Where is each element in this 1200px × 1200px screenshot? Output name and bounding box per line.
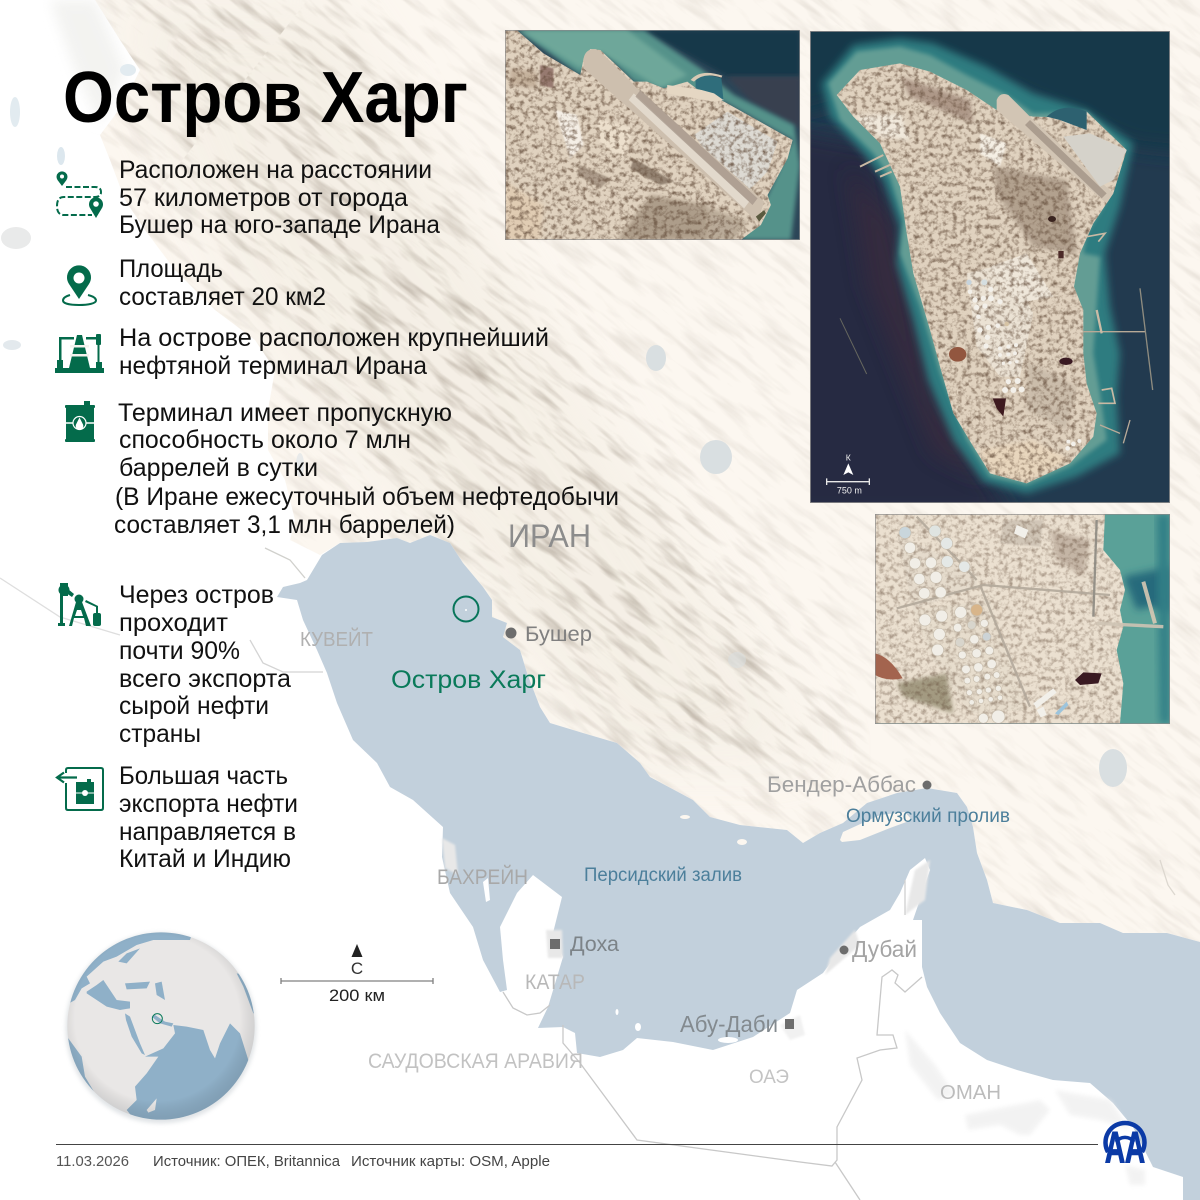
- text block: export share: проходит: [119, 609, 229, 637]
- satellite image: whole island: [810, 31, 1170, 503]
- Kharg location ring: [454, 596, 478, 622]
- footer: source: Источник: ОПЕК, Britannica: [153, 1153, 341, 1170]
- map label: Iran: ИРАН: [508, 518, 591, 554]
- islands: [483, 812, 912, 1043]
- map label: Doha: [550, 933, 619, 956]
- mountains: Zagros band: [101, 0, 1200, 940]
- scale bar: 750 m: [837, 486, 862, 496]
- globe locator: [63, 930, 260, 1127]
- Indian Ocean: [126, 1024, 248, 1120]
- Baltic: [118, 948, 140, 963]
- text block: distance: Расположен на расстоянии: [119, 156, 432, 184]
- text block: destinations: [119, 762, 298, 873]
- logo: Anadolu Agency: AA: [1105, 1123, 1145, 1172]
- ponds: [875, 653, 903, 679]
- icon: location pin: [63, 265, 96, 305]
- text block: distance: Бушер на юго-западе Ирана: [119, 211, 440, 239]
- land: Iran and eastern coast: [95, 0, 1200, 942]
- text block: terminal: нефтяной терминал Ирана: [119, 352, 427, 380]
- map label: Kuwait: КУВЕЙТ: [300, 627, 373, 651]
- icon: oil terminal: [55, 334, 104, 373]
- text block: capacity: Терминал имеет пропускную: [118, 399, 452, 427]
- map label: Persian Gulf: Персидский залив: [584, 865, 742, 886]
- Madagascar: [147, 1098, 157, 1113]
- town: [1063, 133, 1127, 187]
- harbour: [667, 85, 724, 102]
- scale and north arrow: С: [351, 959, 363, 978]
- text block: export share: почти 90%: [119, 637, 240, 665]
- reef shelf: [822, 38, 1133, 493]
- land: [876, 514, 1125, 724]
- text block: destinations: экспорта нефти: [119, 790, 298, 818]
- map label: Dubai: Дубай: [852, 936, 917, 962]
- text block: distance: 57 километров от города: [119, 184, 408, 212]
- text block: capacity: составляет 3,1 млн баррелей): [114, 511, 455, 539]
- Mediterranean: [87, 980, 130, 1010]
- footer rule: [56, 1144, 1098, 1146]
- satellite image: north of the island, airport: [505, 30, 800, 240]
- text block: capacity: [114, 399, 619, 539]
- text block: distance: [119, 156, 440, 239]
- land: [837, 63, 1127, 483]
- text block: capacity: (В Иране ежесуточный объем нефтедобычи: [115, 483, 619, 511]
- storage tanks: [899, 525, 1005, 723]
- buildings: [1014, 525, 1057, 717]
- scale and north arrow: [281, 944, 433, 1005]
- text block: export share: [119, 581, 291, 748]
- text block: capacity: баррелей в сутки: [119, 454, 318, 482]
- jetties: [840, 155, 1153, 443]
- text block: export share: всего экспорта: [119, 665, 291, 693]
- text block: terminal: [119, 324, 549, 380]
- map label: Oman: ОМАН: [940, 1082, 1001, 1104]
- map label: Qatar: КАТАР: [525, 971, 585, 994]
- map label: Bahrain: БАХРЕЙН: [437, 865, 528, 889]
- Red Sea: [125, 1013, 145, 1055]
- text block: area: Площадь: [119, 255, 223, 283]
- ponds: [949, 347, 966, 362]
- footer: map source: Источник карты: OSM, Apple: [351, 1153, 550, 1170]
- icon: oil barrel: [65, 401, 95, 442]
- Atlantic lower-left: [68, 1038, 94, 1092]
- land: [505, 30, 800, 240]
- map label: Doha: Доха: [570, 933, 619, 956]
- runway: [997, 94, 1113, 203]
- water: [810, 31, 1170, 503]
- icon: oil export: [57, 768, 103, 810]
- text block: area: [119, 255, 326, 311]
- map label: Bushehr: Бушер: [525, 623, 592, 646]
- text block: area: составляет 20 км2: [119, 283, 326, 311]
- Pacific edge: [236, 973, 254, 1014]
- Oman mountains texture: [905, 1030, 1145, 1185]
- title: Остров Харг: [63, 58, 468, 138]
- harbour: [1047, 108, 1087, 130]
- map label: Bandar Abbas: Бендер-Аббас: [767, 772, 916, 797]
- logo: Anadolu Agency: [1105, 1123, 1145, 1172]
- text block: destinations: Китай и Индию: [119, 845, 291, 873]
- text block: terminal: На острове расположен крупнейший: [119, 324, 549, 352]
- borders: [0, 548, 1175, 1200]
- lakes: [1, 64, 1127, 787]
- scale and north arrow: 200 км: [329, 986, 385, 1005]
- text block: capacity: способность около 7 млн: [119, 426, 411, 454]
- scale bar: [827, 453, 869, 496]
- text block: export share: Через остров: [119, 581, 274, 609]
- text block: export share: сырой нефти: [119, 692, 269, 720]
- globe marker: [152, 1014, 162, 1024]
- satellite image: oil storage tanks: [875, 514, 1170, 724]
- sea: Persian Gulf and Gulf of Oman: [277, 535, 1200, 1200]
- storage tanks: [966, 279, 1081, 451]
- text block: export share: страны: [119, 720, 201, 748]
- map label: Kharg island: Остров Харг: [391, 666, 546, 694]
- map label: Abu Dhabi: Абу-Даби: [680, 1011, 778, 1037]
- Persian Gulf: [152, 1015, 173, 1027]
- scale bar: К: [846, 453, 851, 463]
- icon: oil pump: [58, 583, 101, 626]
- text block: destinations: направляется в: [119, 818, 296, 846]
- map label: Saudi Arabia: САУДОВСКАЯ АРАВИЯ: [368, 1050, 583, 1073]
- map label: Strait of Hormuz: Ормузский пролив: [846, 806, 1010, 827]
- Black Sea: [125, 982, 150, 989]
- roads: [897, 517, 1163, 707]
- map label: UAE: ОАЭ: [749, 1067, 789, 1088]
- icon: route between pins: [57, 171, 103, 218]
- western mountains texture: [50, 0, 125, 125]
- water: [505, 30, 800, 240]
- footer: date: 11.03.2026: [56, 1153, 129, 1170]
- urban areas: [442, 838, 930, 1040]
- text block: destinations: Большая часть: [119, 762, 288, 790]
- Caspian: [155, 982, 165, 1000]
- runway: [584, 49, 764, 222]
- water: [875, 514, 1170, 724]
- Atlantic north and Arctic: [70, 932, 191, 1003]
